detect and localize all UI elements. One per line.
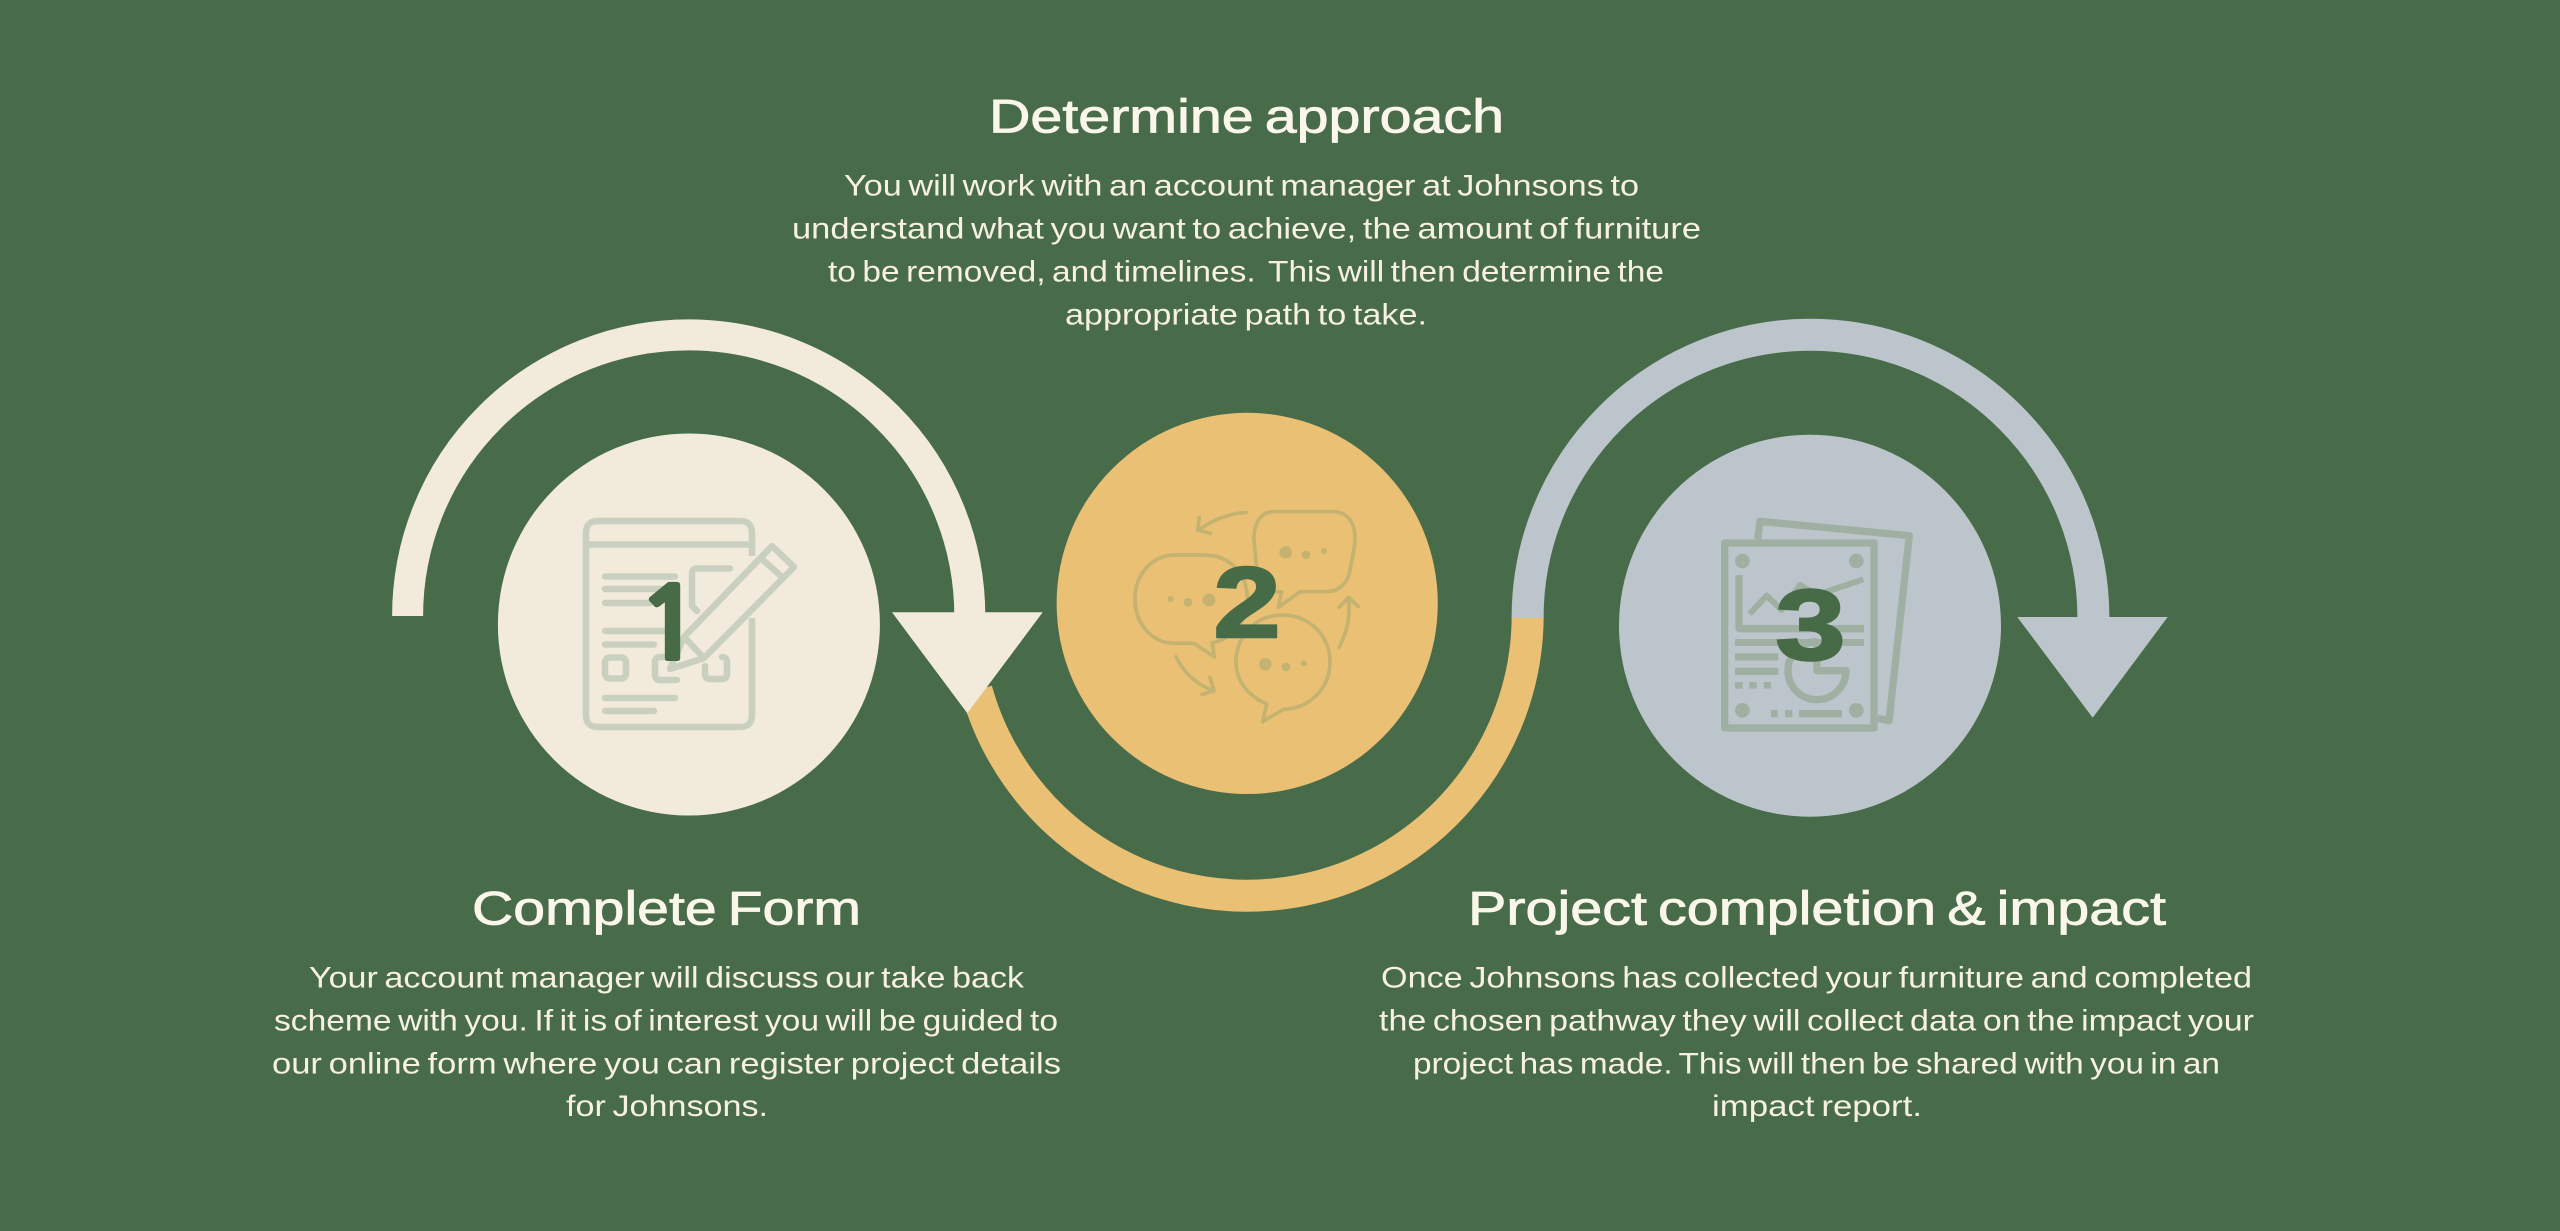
text block: complete form: [272, 962, 1061, 1123]
text block: complete form: Your account manager will discuss our take back: [309, 962, 1025, 995]
arrow: blue arc with head for step 3: [1528, 335, 2168, 718]
text block: project completion and impact: the chosen pathway they will collect data on the impact your: [1379, 1004, 2254, 1037]
text block: project completion and impact: project has made. This will then be shared with you in an: [1413, 1048, 2220, 1081]
step 3 circle: [1619, 435, 2001, 817]
text block: determine approach: [792, 170, 1701, 331]
text block: project completion and impact: impact report.: [1712, 1090, 1922, 1123]
text block: determine approach: You will work with an account manager at Johnsons to: [844, 170, 1639, 203]
step 2 circle: [1057, 413, 1438, 794]
text block: complete form: our online form where you can register project details: [272, 1048, 1061, 1081]
text block: project completion and impact: Once Johnsons has collected your furniture and completed: [1381, 962, 2252, 995]
heading: determine approach: Determine approach: [989, 89, 1504, 142]
arrow: cream arc with head for step 1: [408, 335, 1043, 713]
icon: report documents: [1725, 521, 1909, 728]
number 3: 3: [1776, 570, 1846, 682]
step 1 circle: [498, 434, 880, 816]
text block: determine approach: to be removed, and timelines. This will then determine the: [828, 256, 1664, 289]
arrow: yellow arc from step 2: [976, 615, 1528, 896]
number 2: 2: [1214, 547, 1280, 659]
text block: determine approach: understand what you want to achieve, the amount of furniture: [792, 212, 1701, 245]
number 1: 1: [636, 575, 704, 674]
icon: speech bubbles with cycle arrows: [1135, 512, 1358, 722]
text block: project completion and impact: [1379, 962, 2254, 1123]
heading: project completion and impact: Project completion & impact: [1468, 881, 2166, 934]
text block: determine approach: appropriate path to take.: [1065, 298, 1427, 331]
heading: complete form: Complete Form: [472, 881, 861, 934]
text block: complete form: for Johnsons.: [566, 1090, 768, 1123]
text block: complete form: scheme with you. If it is of interest you will be guided to: [274, 1004, 1058, 1037]
icon: form and pencil: [586, 521, 794, 727]
